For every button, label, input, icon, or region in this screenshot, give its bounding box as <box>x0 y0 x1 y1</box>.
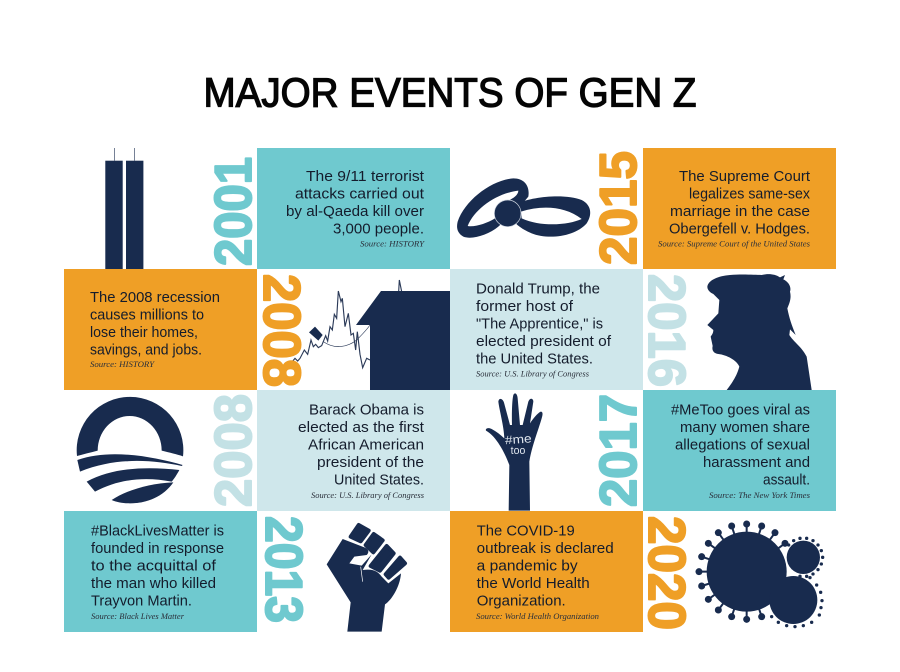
panel: 9/11 attacks: The 9/11 terrorist <box>306 168 425 185</box>
year: 2017: 2017 <box>590 394 648 507</box>
icon: twin towers <box>105 148 143 269</box>
panel: Supreme Court: marriage in the case <box>670 203 810 220</box>
panel: Supreme Court: The Supreme Court <box>679 168 811 185</box>
panel: Supreme Court: Obergefell v. Hodges. <box>669 220 810 238</box>
panel: COVID-19: The COVID-19 <box>477 523 575 540</box>
year: 2008 recession: 2008 <box>252 274 310 387</box>
panel: COVID-19: Organization. <box>477 592 566 610</box>
panel: Barack Obama: Barack Obama is <box>309 401 424 418</box>
panel: Barack Obama: Source: U.S. Library of Congress <box>311 491 424 500</box>
icon: coronavirus <box>695 520 824 628</box>
icon: stock chart and house <box>290 280 450 390</box>
panel: MeToo: #MeToo goes viral as <box>671 401 810 418</box>
panel: 2008 recession <box>64 269 257 390</box>
panel: 9/11 attacks: 3,000 people. <box>333 220 424 238</box>
icon: Obama logo <box>77 397 183 503</box>
panel: 9/11 attacks: Source: HISTORY <box>360 240 426 248</box>
panel: Donald Trump: Source: U.S. Library of Congress <box>476 370 589 379</box>
panel: MeToo: harassment and <box>703 454 810 471</box>
panel: MeToo <box>643 390 836 511</box>
panel: 2008 recession: The 2008 recession <box>90 289 220 306</box>
panel: Black Lives Matter: #BlackLivesMatter is <box>91 523 224 540</box>
panel: 9/11 attacks: by al-Qaeda kill over <box>286 203 424 220</box>
panel: COVID-19: the World Health <box>477 575 590 592</box>
panel: Black Lives Matter <box>64 511 257 632</box>
panel: Supreme Court <box>643 148 836 269</box>
panel: Supreme Court: Source: Supreme Court of the United States <box>658 240 810 248</box>
panel: Donald Trump: former host of <box>476 298 574 315</box>
year: 2001: 2001 <box>205 157 263 266</box>
year: 2016: 2016 <box>637 274 695 387</box>
panel: 2008 recession: causes millions to <box>90 306 204 324</box>
panel: MeToo: assault. <box>763 471 810 488</box>
panel: Barack Obama: African American <box>308 436 424 453</box>
icon: raised hand #metoo: too <box>511 445 525 457</box>
panel: MeToo: Source: The New York Times <box>709 491 810 500</box>
panel: Black Lives Matter: Trayvon Martin. <box>91 592 192 610</box>
panel: COVID-19: outbreak is declared <box>477 540 614 557</box>
icon: raised hand #metoo: #me <box>504 431 532 447</box>
title: MAJOR EVENTS OF GEN Z <box>204 70 696 116</box>
panel: MeToo: many women share <box>680 419 810 436</box>
panel: 2008 recession: savings, and jobs. <box>90 342 202 358</box>
panel: Black Lives Matter: to the acquittal of <box>91 558 217 575</box>
panel: MeToo: allegations of sexual <box>675 436 810 453</box>
icon: raised hand #metoo <box>486 393 543 511</box>
panel: Barack Obama: United States. <box>334 471 424 488</box>
panel: 9/11 attacks: attacks carried out <box>295 186 425 202</box>
panel: Donald Trump: Donald Trump, the <box>476 280 600 297</box>
panel: Barack Obama <box>257 390 450 511</box>
icon: wedding rings <box>457 178 590 238</box>
year: 2008 Obama: 2008 <box>205 394 263 507</box>
year: 2015: 2015 <box>590 151 648 265</box>
panel: Black Lives Matter: Source: Black Lives Matter <box>91 612 185 621</box>
panel: COVID-19: a pandemic by <box>477 558 578 575</box>
panel: Donald Trump <box>450 269 643 390</box>
panel: COVID-19 <box>450 511 643 632</box>
panel: Barack Obama: elected as the first <box>298 419 425 436</box>
panel: 9/11 attacks <box>257 148 450 269</box>
panel: Black Lives Matter: the man who killed <box>91 575 216 592</box>
icon: raised fist <box>327 525 405 632</box>
year: 2013: 2013 <box>254 516 312 623</box>
panel: 2008 recession: lose their homes, <box>90 324 198 341</box>
panel: Barack Obama: president of the <box>317 454 424 471</box>
panel: 2008 recession: Source: HISTORY <box>90 360 156 369</box>
panel: Supreme Court: legalizes same-sex <box>689 186 810 202</box>
panel: Donald Trump: elected president of <box>476 333 612 350</box>
panel: Black Lives Matter: founded in response <box>91 540 224 557</box>
panel: Donald Trump: "The Apprentice," is <box>476 315 603 332</box>
year: 2020: 2020 <box>637 516 695 630</box>
icon: Trump silhouette <box>707 274 812 390</box>
panel: Donald Trump: the United States. <box>476 350 593 367</box>
panel: COVID-19: Source: World Health Organization <box>476 612 599 621</box>
